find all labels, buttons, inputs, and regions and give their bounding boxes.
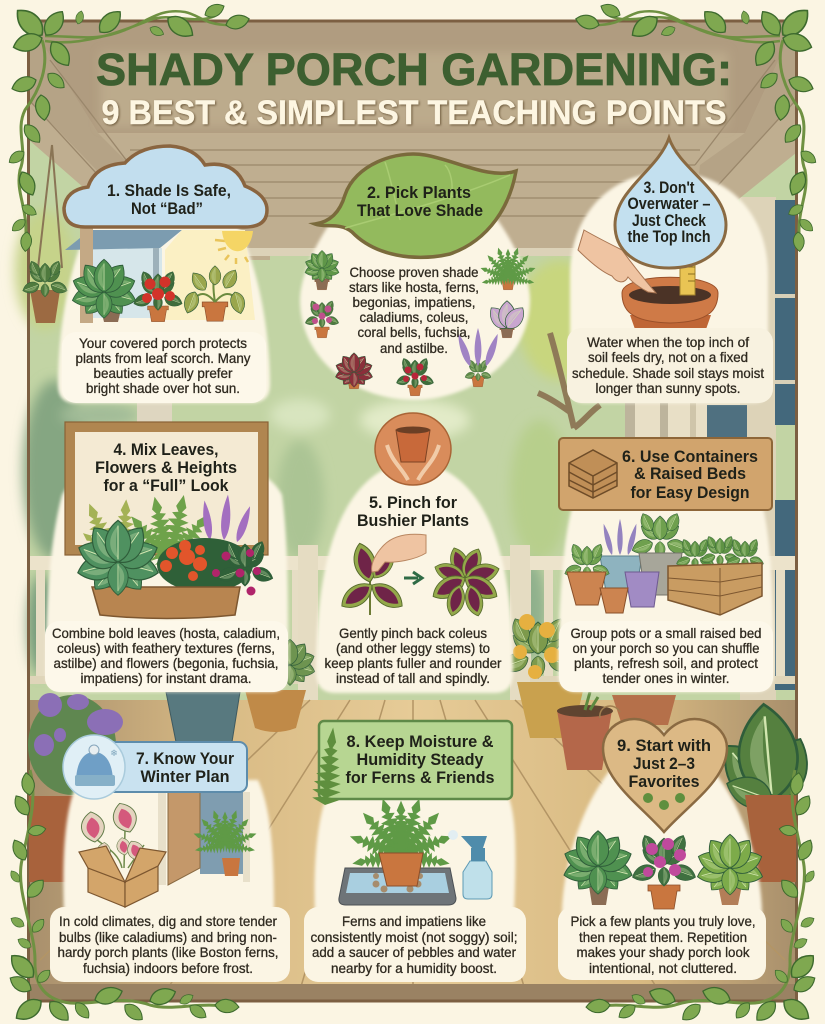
heading 4 [95,440,237,495]
text: panel 4 body: astilbe) and flowers (begonia, fuchsia, [54,655,278,671]
coleus after [428,545,502,618]
heading shape: water drop [615,138,726,268]
plant: hosta [561,831,635,905]
plant: hosta [75,520,161,596]
front edge [29,984,796,1001]
icon: crate [569,450,617,498]
heading 8: 8. Keep Moisture & [346,732,494,751]
text background [559,621,773,692]
heading 2 [357,183,483,220]
plant: wilted [181,266,247,321]
plant: ferns [75,491,218,569]
small plant: coleus [334,353,374,389]
heading shape: heart tag [600,706,727,832]
heading shape: wood frame [70,427,263,550]
heading 7: Winter Plan [140,767,230,786]
heading 8: for Ferns & Friends [346,768,494,787]
door scene [158,792,250,885]
icon: pot with soil [622,277,718,335]
heading 6 [622,447,758,502]
hand pinching [372,534,426,572]
icon: fern frond [311,726,347,806]
heading 3: Just Check [632,211,706,230]
text: panel 7 body [58,913,278,976]
panel 2 backdrop [300,160,530,400]
heading shape: blue banner [80,742,247,792]
text: panel 5 body [324,625,502,686]
heading 1 [107,181,231,218]
heading 9: 9. Start with [617,736,711,755]
caladium leaves [79,800,147,868]
heading 5: 5. Pinch for [369,493,457,512]
panel 4: mix leaves [45,422,288,692]
plant: impatiens [630,833,698,909]
text: panel 6 body [570,625,762,686]
ceiling plank lines [130,150,716,252]
heading 3: Overwater – [628,194,710,213]
icon: pointing hand [578,230,656,293]
plant: red impatiens [132,270,184,322]
heading 4: Flowers & Heights [95,458,237,477]
text: panel 1 body: Your covered porch protects [79,335,247,351]
heading 3 [628,178,710,246]
heading 7: 7. Know Your [136,749,234,768]
panel 4 backdrop [46,454,288,692]
text background [45,621,288,692]
heading 7 [136,749,234,786]
text: panel 9 body: intentional, not cluttered. [589,960,737,976]
vine: top left [6,1,251,252]
heading 4: for a “Full” Look [104,476,229,495]
icon: winter hat badge: ❄ [110,748,118,758]
icon: sun [215,231,253,264]
clover decoration [643,793,685,810]
spray bottle [448,830,492,899]
text background [304,907,526,982]
heading 8: Humidity Steady [356,750,484,769]
text: panel 8 body: Ferns and impatiens like [342,913,486,929]
heading 6: for Easy Design [630,483,750,502]
background plant: lavender left [28,693,123,882]
panel 3: check the top inch [567,138,773,403]
floor boards [29,700,796,990]
panel 2: pick plants [300,154,538,400]
text: panel 3 body: longer than sunny spots. [596,380,740,396]
fern plant [345,794,457,876]
heading 5 [357,493,469,530]
coleus before [336,541,408,615]
background plant: large leaves right [710,702,819,882]
text: panel 4 body: Combine bold leaves (hosta, caladium, [52,625,280,641]
background plant: terracotta pot [245,639,317,732]
small terracotta pot [600,588,628,613]
lavender in blue pot [600,519,642,592]
text: panel 2 body: and astilbe. [380,340,448,356]
text: panel 7 body: hardy porch plants (like Boston ferns, [58,944,278,960]
vine: top right [574,1,819,252]
icon: ruler [680,253,695,295]
herb in terracotta pot [563,542,611,605]
panel 9 backdrop [562,730,762,915]
text: panel 6 body: plants, refresh soil, and protect [574,655,758,671]
text: panel 6 body: Group pots or a small raised bed [570,625,762,641]
text: panel 9 body: Pick a few plants you truly love, [570,913,756,929]
heading 2: 2. Pick Plants [367,183,471,202]
title glow [100,52,728,127]
plant: red and pink flowers [157,538,275,602]
small plant: begonia [304,299,340,338]
window box arrangement [75,491,275,618]
ceiling soffit [29,22,796,133]
text: panel 5 body: keep plants fuller and rounder [324,655,502,671]
small plant: astilbe [455,328,501,387]
panel 5: pinch [316,413,513,693]
ceiling corner boards [29,22,796,210]
icon: pot in hands [375,413,451,485]
text: panel 6 body: on your porch so you can shuffle [572,640,760,656]
text: panel 4 body: impatiens) for instant drama. [80,670,252,686]
text: panel 3 body: schedule. Shade soil stays moist [572,365,764,381]
house wall right [625,197,795,710]
text: panel 5 body: Gently pinch back coleus [339,625,487,641]
fern in doorway [191,807,259,876]
text: panel 1 body: beauties actually prefer [94,365,233,381]
panel 6: containers [558,438,774,692]
arrow [404,572,422,584]
background plant: blue pot [166,692,240,742]
floor [29,700,796,1001]
purple pot [625,572,659,607]
text: panel 4 body [52,625,280,686]
subtitle: 9 BEST & SIMPLEST TEACHING POINTS [102,94,726,132]
vine: bottom right [586,770,819,1024]
text: panel 3 body: soil feels dry, not on a fixed [588,349,748,365]
tree branch [538,333,600,428]
text: panel 4 body: coleus) with feathery textures (ferns, [57,640,275,656]
text: panel 8 body: nearby for a humidity boost. [331,960,497,976]
text background [50,907,290,982]
text: panel 2 body: begonias, impatiens, [352,294,476,310]
text: panel 9 body [570,913,756,976]
heading 1: 1. Shade Is Safe, [107,181,231,200]
heading 9 [617,736,711,791]
heading 5: Bushier Plants [357,511,469,530]
small plant: hosta [304,250,340,290]
porch posts [137,225,668,445]
heading 6: 6. Use Containers [622,447,758,466]
ceiling corner lines [29,60,796,210]
plant: astilbe [201,494,254,543]
text: panel 1 body [76,335,250,396]
panel 1 backdrop [58,165,270,403]
raised bed [668,535,765,615]
plant: hosta [70,259,138,322]
heading shape: wood sign [559,438,772,510]
panel 1: shade is safe [58,146,270,403]
heading 2: That Love Shade [357,201,483,220]
panel 8 backdrop [315,790,515,915]
text: panel 7 body: In cold climates, dig and store tender [59,913,277,929]
text: panel 7 body: fuchsia) indoors before frost. [83,960,253,976]
text: panel 1 body: plants from leaf scorch. Many [76,350,250,366]
icon: winter hat badge [63,735,125,799]
text: panel 2 body [349,264,479,356]
heading 4: 4. Mix Leaves, [114,440,218,459]
herb in gray pot [630,511,690,595]
panel 6 backdrop [558,500,774,692]
heading shape: green sign [319,721,512,799]
text: panel 2 body: coral bells, fuchsia, [358,324,470,340]
heading 9: Favorites [628,772,700,791]
heading 3: 3. Don't [644,178,695,197]
panel 7: winter plan [50,735,290,982]
background plant: yellow flowers [498,614,585,738]
plant: leafy [695,834,765,905]
heading 1: Not “Bad” [131,199,203,218]
railing [29,545,796,710]
small plant: impatiens [395,357,435,396]
heading 3: the Top Inch [628,227,710,246]
text: panel 8 body: consistently moist (not soggy) soil; [310,929,518,945]
text: panel 3 body: Water when the top inch of [587,334,749,350]
heading shape: cloud [64,146,267,227]
text: panel 2 body: Choose proven shade [350,264,479,280]
terracotta pot [379,853,423,886]
text: panel 8 body [310,913,518,976]
text background [62,332,266,403]
frame outline [65,422,268,555]
background trees [15,210,602,675]
window scene [65,228,255,323]
text: panel 9 body: makes your shady porch look [576,944,750,960]
panel 8: moisture [304,721,526,982]
background plant: red pot [557,692,676,770]
text: panel 9 body: then repeat them. Repetition [579,929,747,945]
vine: bottom left [6,770,239,1024]
text: panel 1 body: bright shade over hot sun. [86,380,240,396]
text: panel 2 body: stars like hosta, ferns, [349,279,479,295]
title: SHADY PORCH GARDENING: [96,44,732,95]
text: panel 6 body: tender ones in winter. [602,670,730,686]
wood planter [92,587,240,618]
heading 6: & Raised Beds [634,464,746,483]
cardboard box [79,846,166,907]
heading 9: Just 2–3 [633,754,695,773]
text: panel 3 body [572,334,764,396]
panel 7 backdrop [63,780,274,915]
heading shape: leaf [315,154,516,257]
text: panel 5 body: (and other leggy stems) to [336,640,490,656]
panel 3 backdrop [570,172,768,403]
hanging basket [21,145,69,323]
leaf veins [345,162,510,228]
text: panel 2 body: caladiums, coleus, [360,309,468,325]
garden view [29,22,796,702]
ceiling boards [29,22,796,260]
text: panel 5 body: instead of tall and spindly. [336,670,490,686]
pebble tray [339,868,456,905]
small plant: fern [478,245,538,290]
panel 9: start with favorites [558,706,766,980]
text background [558,907,766,980]
text: panel 8 body: add a saucer of pebbles and water [312,944,516,960]
heading 8 [346,732,494,787]
panel 5 backdrop [316,460,513,693]
text: panel 7 body: bulbs (like caladiums) and bring non- [59,929,277,945]
text background [567,328,773,403]
small plant: caladium [485,301,529,338]
